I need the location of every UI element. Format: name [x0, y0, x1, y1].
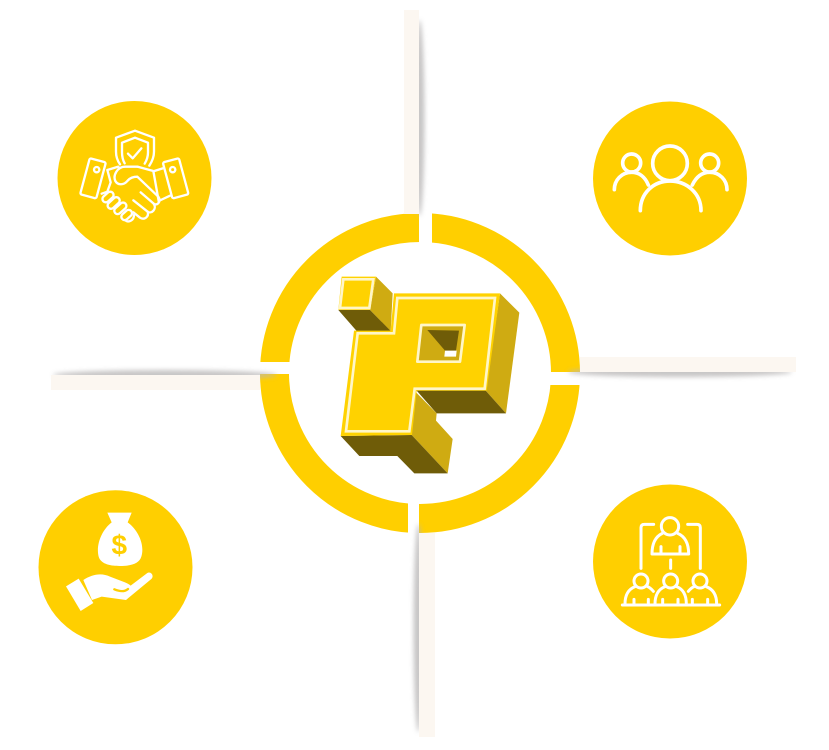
- icon: left cuff: [80, 158, 106, 199]
- connector: right bar: [568, 357, 796, 377]
- icon: left person: [614, 154, 648, 190]
- logo: small cube: [338, 277, 393, 331]
- icon: right person: [692, 154, 727, 190]
- icon: shield: [116, 131, 154, 166]
- logo: yellow 3D P: [338, 277, 519, 473]
- logo: front face: [341, 293, 500, 436]
- icon: open hand: [83, 573, 153, 600]
- icon: team row: [622, 574, 720, 605]
- logo: window: [417, 325, 465, 362]
- center ring: [250, 205, 590, 542]
- icon: leader: [652, 518, 689, 554]
- icon: money bag: [98, 513, 142, 566]
- icon circle: team of three: [593, 102, 747, 256]
- connector: left bar: [51, 370, 277, 390]
- icon: org brackets: [641, 524, 700, 568]
- icon: cuff: [66, 579, 93, 611]
- icon circle: money bag in hand: [38, 490, 192, 644]
- icon circle: leader and team: [593, 484, 747, 638]
- icon: hands: [101, 167, 170, 221]
- icon: center person: [640, 146, 701, 211]
- icon circle: handshake and shield: [58, 101, 212, 255]
- icon: dollar sign: $: [112, 529, 128, 560]
- icon: right cuff: [163, 158, 189, 199]
- connector: top bar: [404, 10, 424, 216]
- connector: bottom bar: [414, 524, 435, 737]
- logo: extruded sides: [341, 293, 519, 473]
